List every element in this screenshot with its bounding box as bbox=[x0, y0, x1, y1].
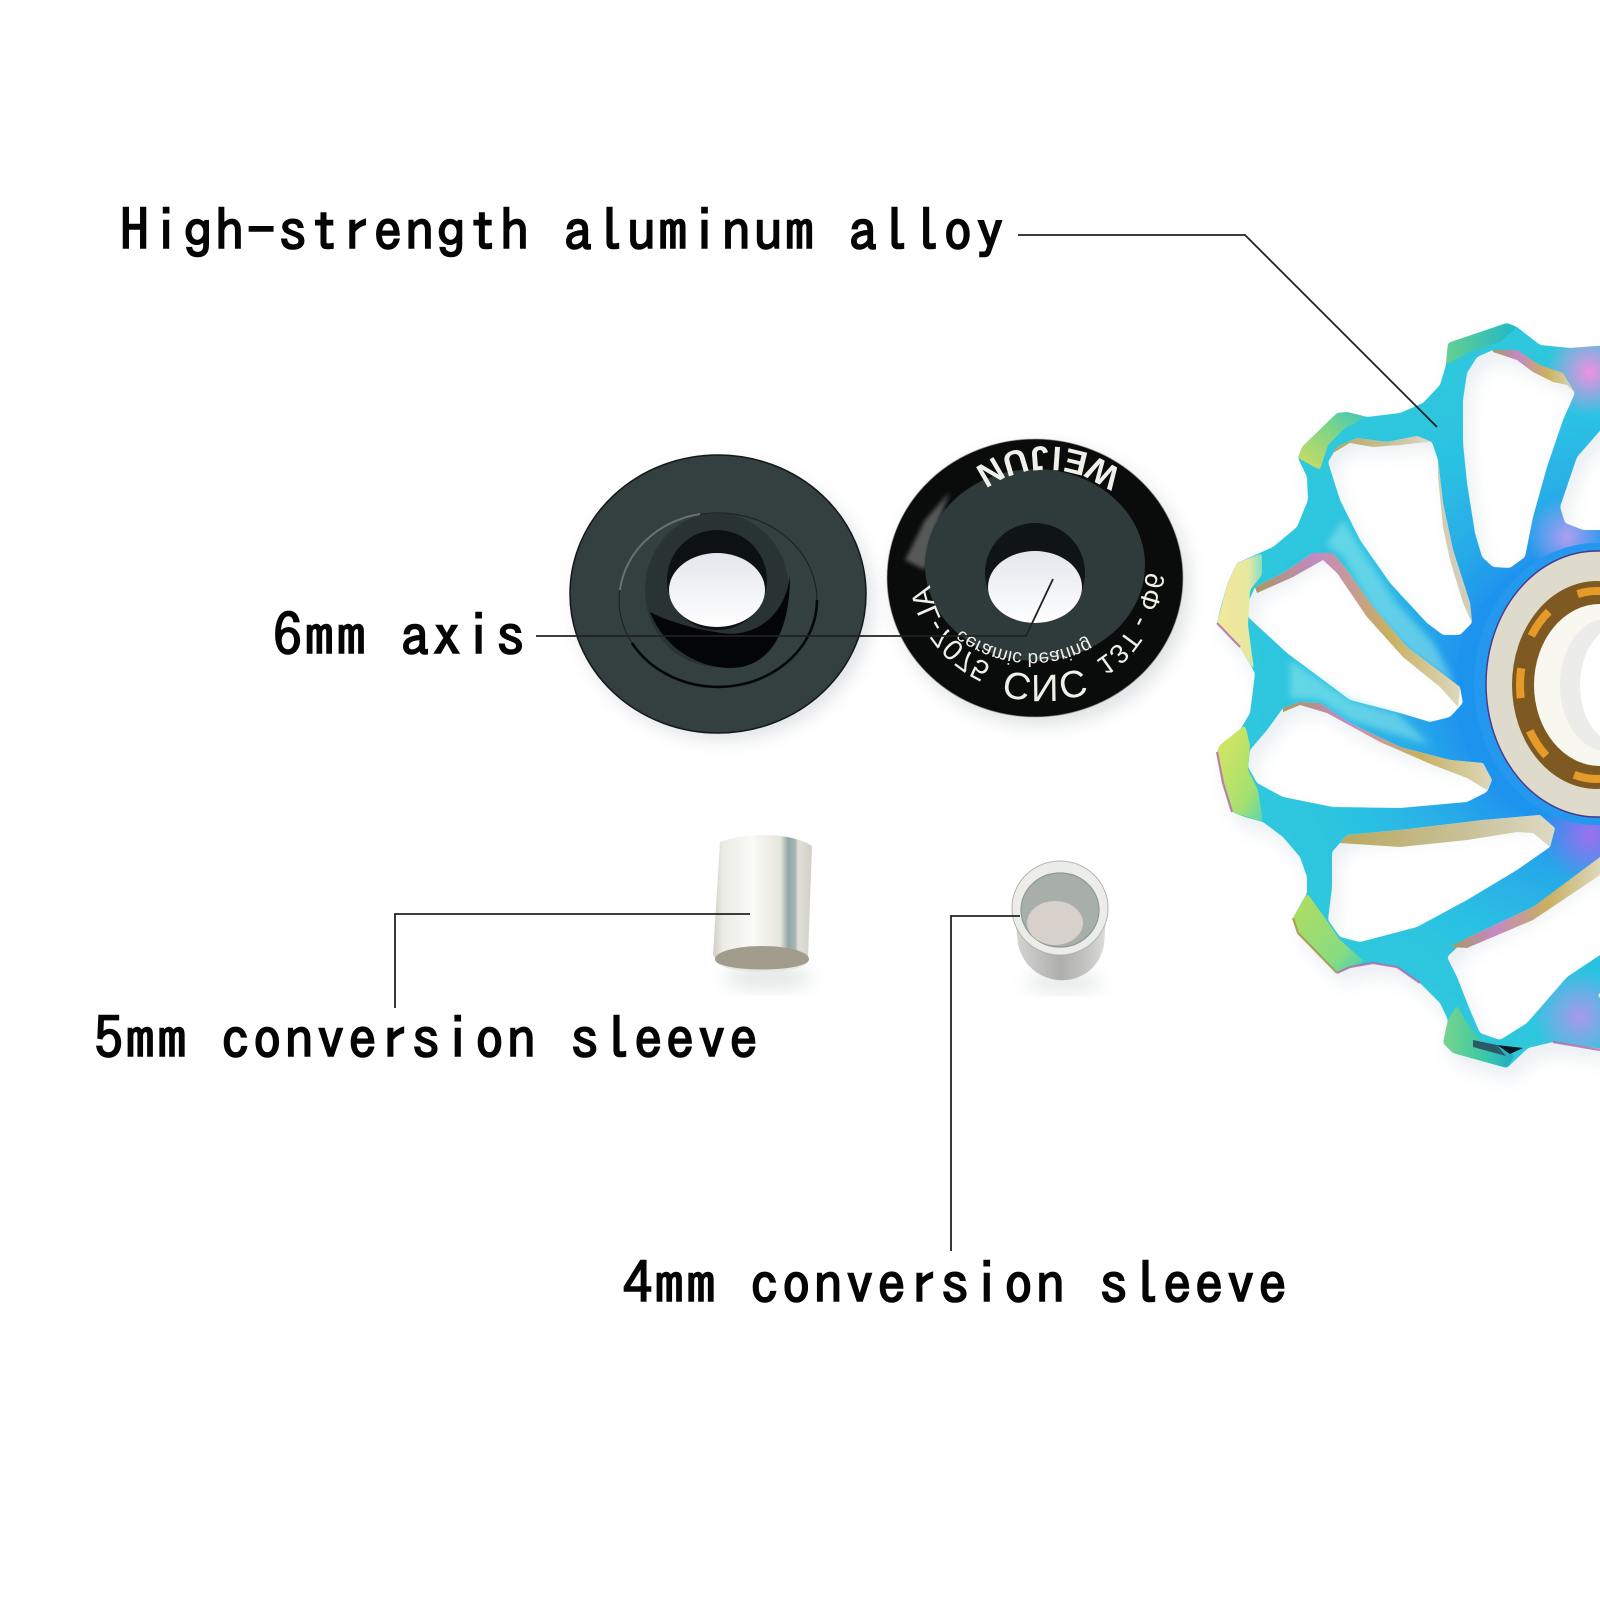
leader line: 4mm sleeve bbox=[951, 916, 1020, 1251]
bearing text: ceramic bearing bbox=[957, 631, 1092, 667]
4mm sleeve bbox=[1012, 861, 1108, 990]
leader line: 6mm axis bbox=[536, 579, 1053, 636]
brand text: WEIJUN bbox=[976, 446, 1118, 491]
tooth tips bbox=[1217, 323, 1517, 1068]
right washer with engraved text bbox=[886, 438, 1195, 731]
label: 4mm conversion sleeve: 4mm conversion sleeve bbox=[623, 1253, 1287, 1311]
left washer bbox=[570, 455, 872, 739]
spec text: AL-7075 bbox=[912, 585, 988, 682]
spec text: 13T - Φ6 bbox=[1096, 574, 1164, 672]
spec text: CNC bbox=[1004, 670, 1086, 702]
inner walls of the spokes bbox=[1217, 350, 1600, 1056]
label: high-strength aluminum alloy: High-strength aluminum alloy bbox=[120, 200, 1004, 258]
label: 6mm axis: 6mm axis bbox=[273, 605, 525, 663]
leader line: aluminum alloy bbox=[1018, 235, 1437, 427]
pale spoke highlights bbox=[1290, 520, 1455, 745]
gear pulley wheel bbox=[1217, 323, 1600, 1080]
5mm sleeve bbox=[713, 835, 812, 988]
spec text bbox=[912, 574, 1164, 702]
collar bbox=[645, 513, 789, 667]
leader line: 5mm sleeve bbox=[395, 914, 750, 1008]
label: 5mm conversion sleeve: 5mm conversion sleeve bbox=[94, 1008, 758, 1066]
bearing bbox=[1474, 543, 1600, 825]
